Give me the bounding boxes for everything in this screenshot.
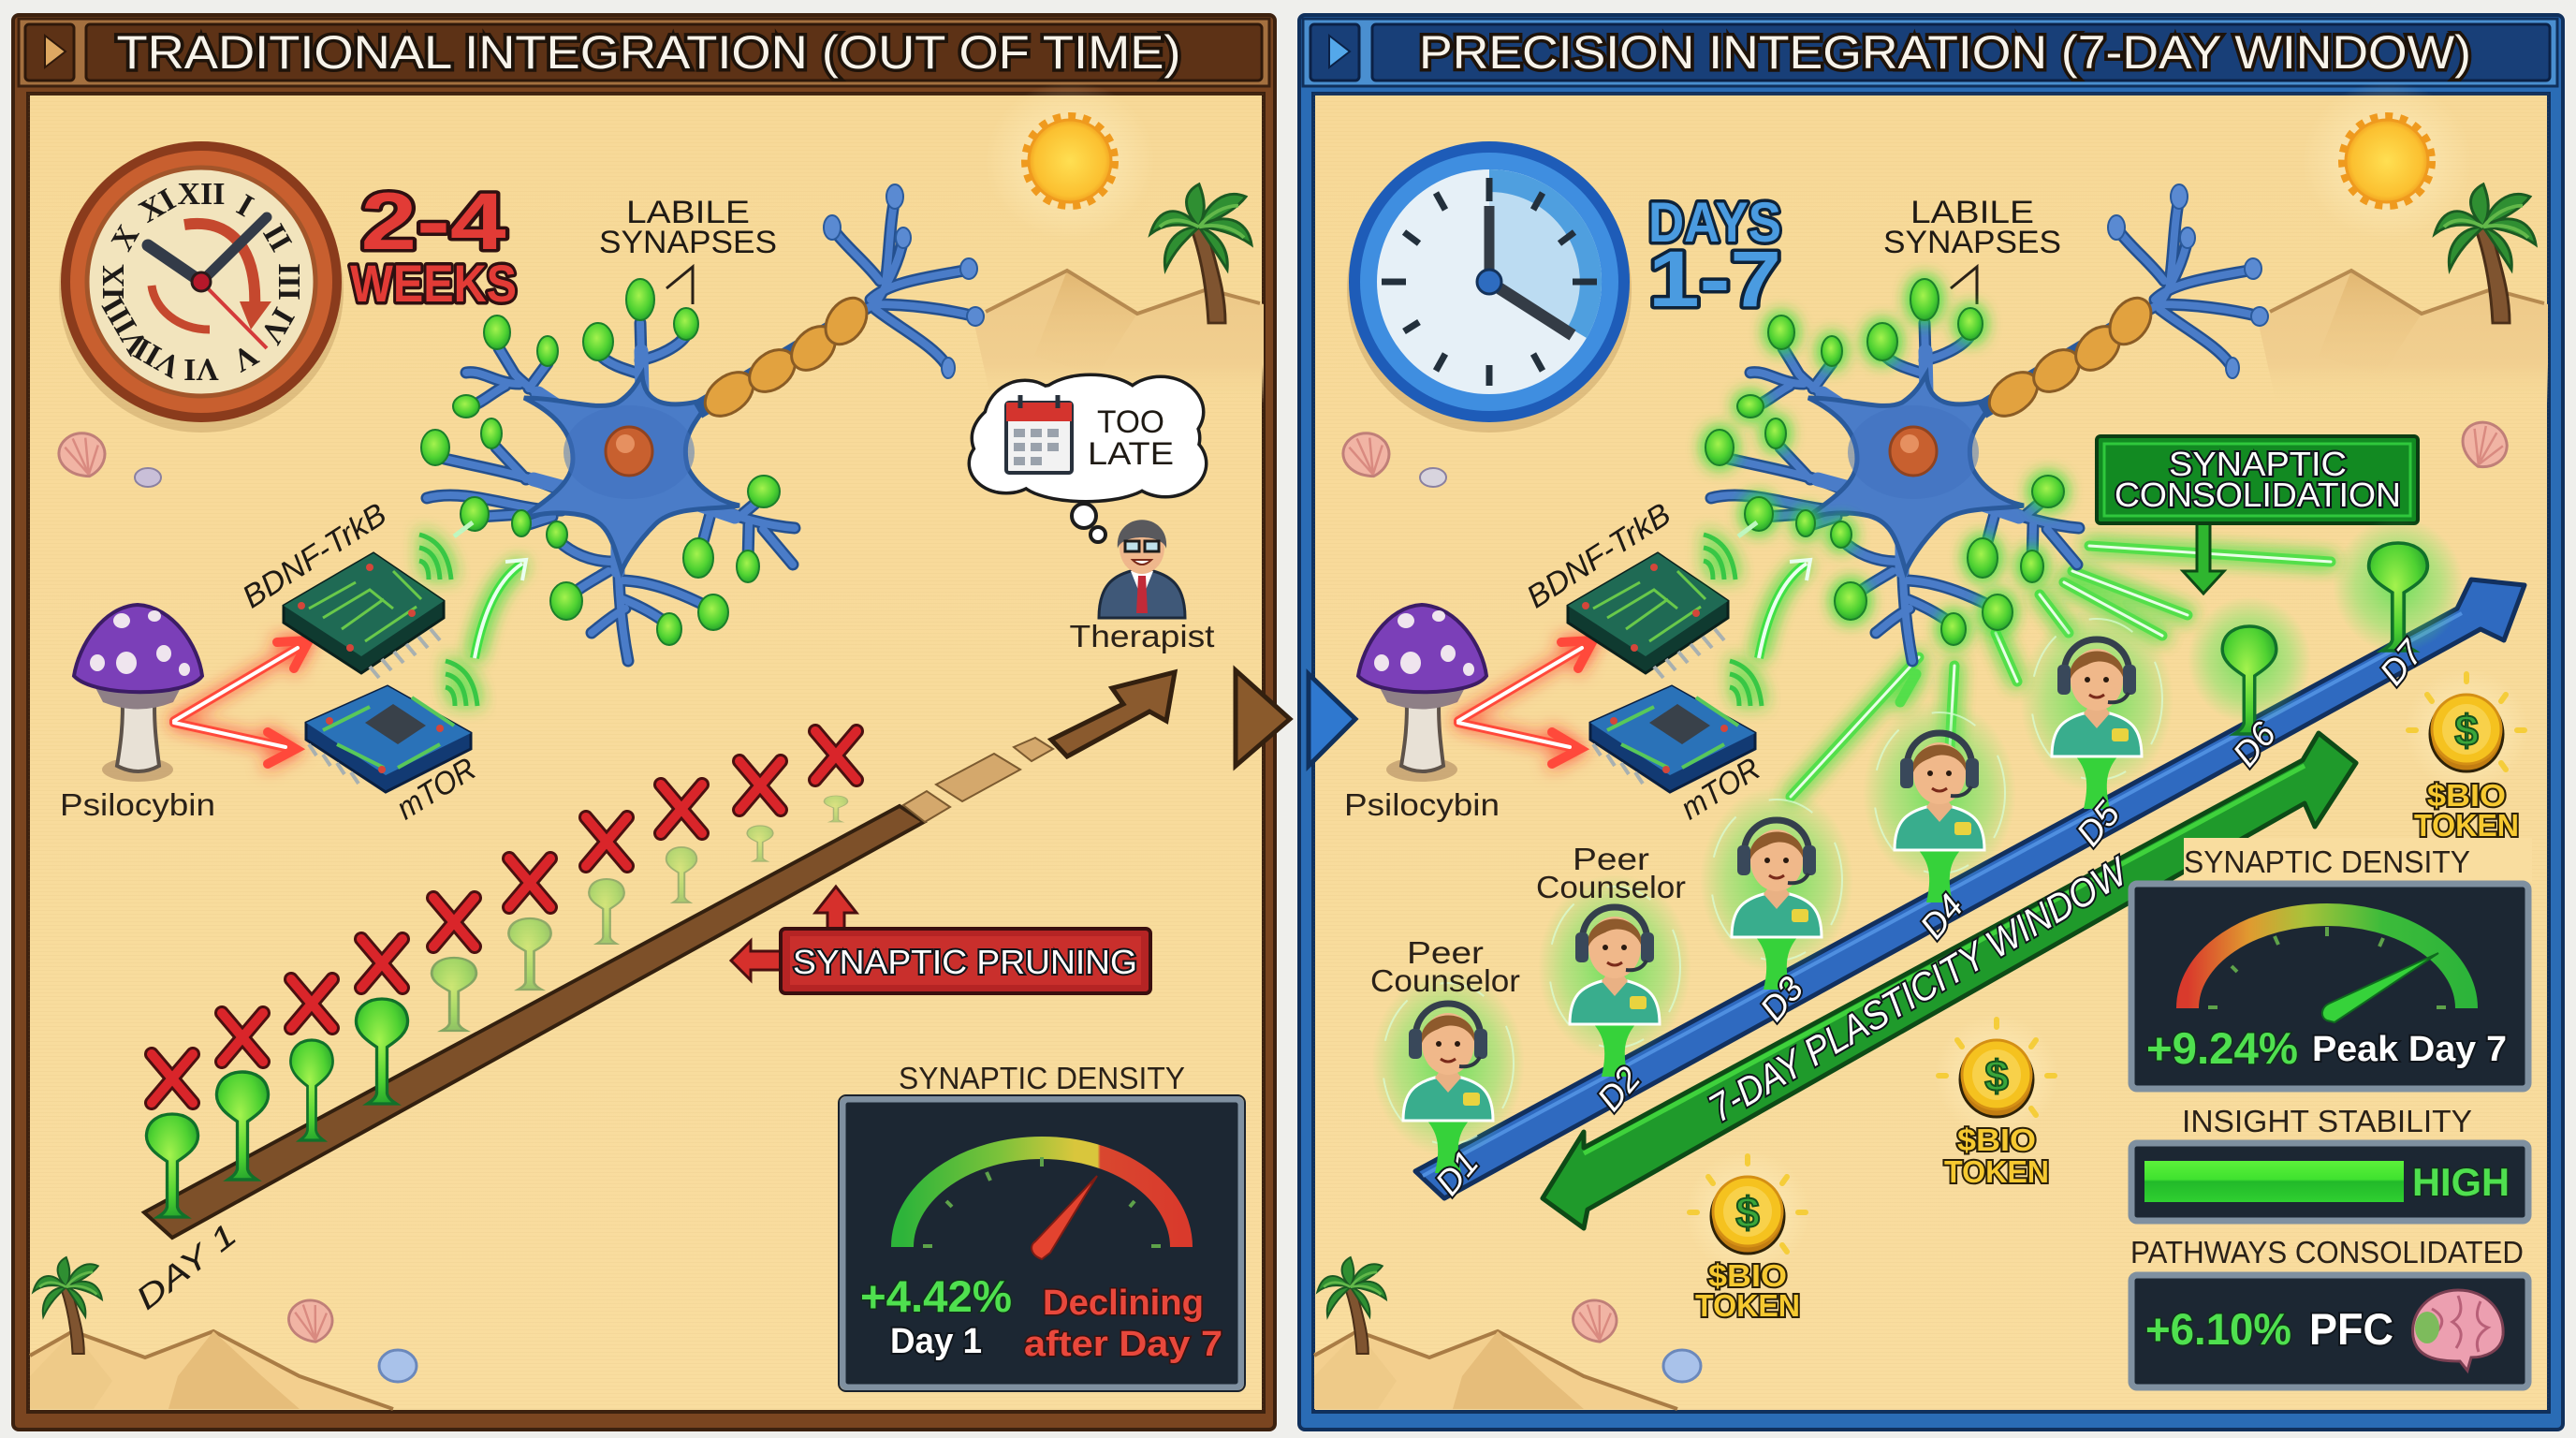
red x marks bbox=[152, 731, 856, 1103]
day 1 label: DAY 1 bbox=[129, 1217, 243, 1317]
arrow: to precision panel bbox=[1236, 670, 1290, 766]
days label: DAYS bbox=[1648, 191, 1781, 254]
icon: roman clock: VII bbox=[128, 330, 187, 385]
icon: roman clock: IX bbox=[96, 264, 131, 300]
right panel frame bbox=[1299, 15, 2563, 1430]
right header bar bbox=[1303, 19, 2557, 86]
synaptic density title bbox=[2184, 838, 2532, 882]
timeline ribbon D1 to D7 bbox=[1415, 580, 2525, 1198]
days label: 1-7 bbox=[1648, 235, 1781, 323]
panel: insight stability bar: HIGH bbox=[2412, 1160, 2510, 1204]
labile synapses label: SYNAPSES bbox=[1883, 225, 2061, 260]
coin: bio token 3: $BIO bbox=[2427, 778, 2506, 813]
palm tree bbox=[1150, 184, 1251, 323]
icon: roman clock: X bbox=[105, 219, 146, 257]
day markers: D5 bbox=[2070, 794, 2128, 853]
panel: synaptic density gauge: Peak Day 7 bbox=[2312, 1030, 2507, 1069]
peer counselor labels: Peer bbox=[1407, 935, 1484, 970]
chip: mTOR bbox=[306, 686, 471, 792]
peer counselor labels bbox=[1370, 842, 1686, 998]
callout: synaptic consolidation bbox=[2097, 436, 2418, 594]
psilocybin label: Psilocybin bbox=[60, 787, 215, 822]
red arrows bbox=[174, 640, 309, 764]
left heading: TRADITIONAL INTEGRATION (OUT OF TIME) bbox=[116, 26, 1181, 79]
icon: blue clock bbox=[1347, 141, 1632, 433]
thought bubble: TOO bbox=[1097, 404, 1164, 440]
panel: synaptic density gauge: +4.42% bbox=[860, 1271, 1012, 1321]
decorative sun bbox=[2303, 81, 2471, 241]
labile synapses label bbox=[599, 195, 777, 304]
arrow: 7-day plasticity window: 7-DAY PLASTICITY WINDOW bbox=[1701, 848, 2137, 1131]
panel: precision integration bbox=[1299, 15, 2563, 1430]
BDNF label: BDNF-TrkB bbox=[236, 496, 393, 615]
day markers: D4 bbox=[1913, 888, 1970, 946]
coin: bio token 1 bbox=[1686, 1151, 1809, 1323]
panel: pathways consolidated: +6.10% bbox=[2145, 1304, 2291, 1354]
dunes upper right bbox=[2258, 271, 2548, 404]
callout: synaptic pruning: SYNAPTIC PRUNING bbox=[793, 943, 1137, 981]
coin: bio token 2: $ bbox=[1984, 1051, 2009, 1100]
panel: traditional integration bbox=[13, 15, 1290, 1430]
icon: roman clock: II bbox=[256, 219, 299, 257]
shells bbox=[1338, 418, 2512, 487]
panel: synaptic density gauge: Day 1 bbox=[890, 1322, 982, 1361]
icon: roman clock: IV bbox=[253, 301, 300, 350]
chip: mTOR bbox=[1590, 686, 1755, 792]
palm tree bbox=[2435, 184, 2536, 323]
days label bbox=[1648, 191, 1781, 323]
decorative sun bbox=[986, 81, 1154, 241]
right heading: PRECISION INTEGRATION (7-DAY WINDOW) bbox=[1419, 26, 2471, 79]
signal arcs and green arrows bbox=[1704, 522, 1810, 706]
therapist bbox=[1099, 520, 1185, 618]
chip: BDNF-TrkB bbox=[284, 553, 444, 678]
coin: bio token 1: TOKEN bbox=[1695, 1288, 1800, 1323]
coin: bio token 2: $BIO bbox=[1957, 1123, 2036, 1157]
synaptic spines declining bbox=[146, 796, 848, 1217]
thought bubble: LATE bbox=[1088, 436, 1174, 472]
dunes lower left bbox=[1314, 1331, 1677, 1409]
day markers: D1 bbox=[1428, 1144, 1486, 1202]
coin: bio token 3: $ bbox=[2454, 706, 2479, 755]
consolidation beams bbox=[1791, 546, 2331, 797]
icon: roman clock: XII bbox=[177, 177, 226, 212]
icon: roman clock: I bbox=[231, 188, 259, 224]
coin: bio token 1: $ bbox=[1735, 1188, 1760, 1237]
duration label: 2-4 bbox=[361, 177, 506, 267]
coin: bio token 3: TOKEN bbox=[2414, 808, 2519, 843]
lower shells bbox=[285, 1295, 417, 1382]
dunes upper right bbox=[973, 271, 1264, 404]
mTOR label: mTOR bbox=[1675, 751, 1766, 827]
thought bubble bbox=[971, 376, 1205, 542]
left panel frame bbox=[13, 15, 1275, 1430]
red arrows bbox=[1458, 640, 1593, 764]
spines D6 and D7 bbox=[2188, 518, 2464, 734]
labile synapses label bbox=[1883, 195, 2061, 304]
panel: synaptic density gauge: after Day 7 bbox=[1024, 1325, 1222, 1364]
palm lower left bbox=[1317, 1257, 1386, 1354]
icon: roman clock: V bbox=[226, 337, 264, 378]
icon: roman clock: VI bbox=[183, 352, 219, 387]
callout: synaptic pruning bbox=[731, 887, 1150, 993]
mTOR label: mTOR bbox=[390, 751, 482, 827]
panel: synaptic density gauge: Declining bbox=[1043, 1284, 1204, 1323]
timeline bar bbox=[144, 672, 1175, 1238]
shells bbox=[53, 427, 161, 487]
arrow: panel entry bbox=[1309, 674, 1355, 766]
signal arcs and green arrows bbox=[419, 522, 526, 706]
duration label bbox=[350, 177, 517, 313]
arrow: 7-day plasticity window bbox=[1543, 733, 2356, 1228]
psilocybin label: Psilocybin bbox=[1344, 787, 1500, 822]
panel: pathways consolidated bbox=[2131, 1275, 2528, 1387]
dunes lower left bbox=[30, 1331, 393, 1409]
day markers: D3 bbox=[1753, 969, 1811, 1028]
callout: synaptic consolidation: CONSOLIDATION bbox=[2115, 476, 2401, 514]
peer counselors bbox=[1371, 606, 2174, 1173]
panel: insight stability bar bbox=[2131, 1143, 2528, 1221]
day markers bbox=[1428, 633, 2431, 1202]
coin: bio token 1: $BIO bbox=[1708, 1258, 1787, 1293]
pathways consolidated title: PATHWAYS CONSOLIDATED bbox=[2130, 1235, 2524, 1269]
panel: synaptic density gauge bbox=[839, 1095, 1245, 1391]
day markers: D6 bbox=[2226, 714, 2284, 773]
duration label: WEEKS bbox=[350, 254, 517, 313]
labile synapses label: SYNAPSES bbox=[599, 225, 777, 260]
lower shells bbox=[1569, 1295, 1701, 1382]
icon: roman clock: XI bbox=[134, 183, 182, 229]
panel: synaptic density gauge bbox=[2131, 884, 2528, 1089]
peer counselor labels: Counselor bbox=[1536, 870, 1686, 904]
left header bar bbox=[19, 19, 1269, 86]
chip: BDNF-TrkB bbox=[1568, 553, 1728, 678]
synaptic density title: SYNAPTIC DENSITY bbox=[899, 1061, 1185, 1095]
synaptic density title: SYNAPTIC DENSITY bbox=[2184, 844, 2470, 879]
coin: bio token 3 bbox=[2405, 668, 2528, 843]
insight stability title: INSIGHT STABILITY bbox=[2182, 1104, 2472, 1138]
labile synapses label: LABILE bbox=[626, 195, 750, 230]
therapist label: Therapist bbox=[1069, 619, 1215, 653]
coin: bio token 2: TOKEN bbox=[1944, 1154, 2049, 1189]
panel: pathways consolidated: PFC bbox=[2309, 1304, 2393, 1354]
neuron glowing bbox=[1705, 184, 2268, 661]
icon: psilocybin mushroom bbox=[1358, 605, 1486, 782]
day markers: D7 bbox=[2373, 633, 2431, 692]
day markers: D2 bbox=[1590, 1059, 1648, 1118]
labile synapses label: LABILE bbox=[1910, 195, 2034, 230]
panel: synaptic density gauge: +9.24% bbox=[2146, 1023, 2298, 1073]
callout: synaptic consolidation: SYNAPTIC bbox=[2169, 445, 2347, 483]
coin: bio token 2 bbox=[1935, 1014, 2058, 1189]
icon: roman clock bbox=[59, 141, 344, 433]
icon: roman clock: III bbox=[271, 263, 306, 301]
palm lower left bbox=[33, 1257, 102, 1354]
BDNF label: BDNF-TrkB bbox=[1520, 496, 1677, 615]
icon: psilocybin mushroom bbox=[74, 605, 202, 782]
peer counselor labels: Peer bbox=[1573, 842, 1649, 876]
peer counselor labels: Counselor bbox=[1370, 963, 1520, 998]
icon: roman clock: VIII bbox=[95, 291, 155, 360]
neuron bbox=[421, 184, 984, 661]
